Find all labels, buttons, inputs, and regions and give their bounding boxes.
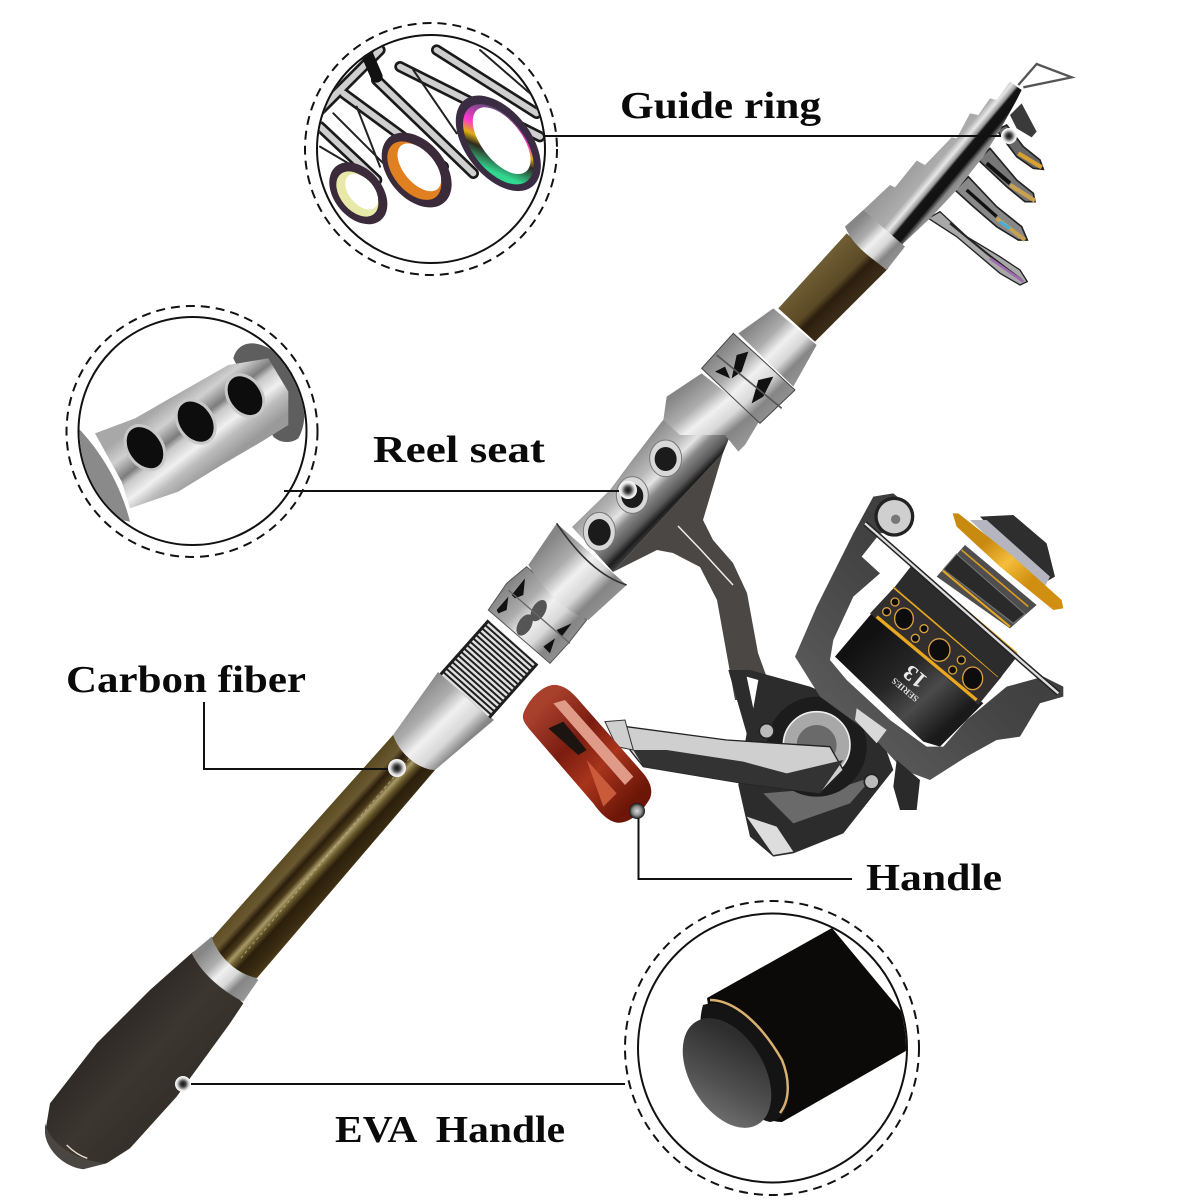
handle knob — [523, 685, 651, 823]
heading: guide ring: Guide ring — [620, 85, 821, 127]
marker: guide ring — [1001, 128, 1017, 144]
spool band — [870, 587, 1002, 705]
marker: handle — [629, 803, 645, 819]
guide 2 — [997, 125, 1043, 169]
lower knurled nut — [488, 567, 587, 663]
dashed ring — [625, 901, 919, 1195]
leader: handle — [638, 818, 852, 879]
top cap — [980, 515, 1055, 583]
handle crank — [523, 685, 843, 823]
gold flange — [953, 513, 1063, 610]
guide ring close-up — [317, 50, 558, 236]
fishing rod — [45, 64, 1072, 1169]
rotor housing — [728, 670, 893, 857]
heading: EVA handle: EVA Handle — [335, 1109, 565, 1151]
guide 3 — [978, 148, 1035, 202]
tip wire — [1018, 64, 1072, 87]
guide 5 — [928, 212, 1027, 285]
crank arm shadow — [633, 750, 843, 793]
small ring — [329, 162, 388, 224]
upper ring — [845, 210, 905, 270]
spool body — [835, 613, 983, 747]
upper spool and neck — [895, 563, 1018, 678]
stem highlight — [678, 526, 733, 585]
series lettering — [890, 660, 932, 704]
spinning reel — [523, 493, 1063, 857]
marker: reel seat — [619, 481, 637, 499]
telescopic sections — [863, 82, 1022, 270]
bail wire — [865, 523, 1058, 693]
solid ring — [78, 317, 306, 545]
reel seat — [572, 400, 745, 572]
seat holes — [583, 440, 682, 551]
dashed ring — [66, 306, 318, 557]
series lettering: 13 — [898, 660, 932, 694]
reel frame and spool — [795, 493, 1063, 810]
silver collar — [393, 672, 494, 770]
carbon fiber lower section — [212, 735, 435, 978]
heading: carbon fiber: Carbon fiber — [66, 659, 306, 701]
reel seat close-up — [78, 343, 304, 522]
reel frame — [795, 493, 1063, 780]
leader: EVA handle — [191, 1083, 625, 1085]
series lettering: SERIES — [890, 676, 921, 704]
guide 4 — [955, 177, 1027, 240]
panel: EVA handle detail — [625, 901, 925, 1195]
heading: reel seat: Reel seat — [373, 429, 545, 471]
panel: reel seat detail — [66, 306, 318, 557]
leader: carbon fiber — [204, 702, 390, 769]
EVA grip close-up — [682, 928, 906, 1128]
coil thread — [465, 642, 513, 696]
solid ring — [317, 35, 545, 263]
marker: EVA handle — [175, 1076, 191, 1092]
reel stem — [613, 453, 775, 700]
guide rings on the rod — [845, 64, 1072, 285]
crank collar — [605, 720, 633, 750]
leader: reel seat — [284, 490, 620, 492]
spool holes — [883, 598, 983, 690]
marker: carbon fiber — [388, 759, 406, 777]
line roller — [874, 497, 914, 537]
EVA grip — [45, 937, 258, 1169]
lower cone — [528, 523, 627, 620]
middle ring — [382, 132, 452, 208]
dashed ring — [305, 23, 557, 275]
guide 1 — [1010, 103, 1037, 137]
crank arm — [627, 727, 843, 793]
leader: guide ring — [543, 135, 1004, 137]
solid ring — [638, 914, 907, 1182]
heading: handle: Handle — [866, 857, 1002, 899]
panel: guide ring detail — [305, 23, 558, 275]
upper rod fittings — [663, 233, 888, 452]
coil thread highlights — [465, 642, 513, 696]
large ring — [456, 96, 541, 192]
